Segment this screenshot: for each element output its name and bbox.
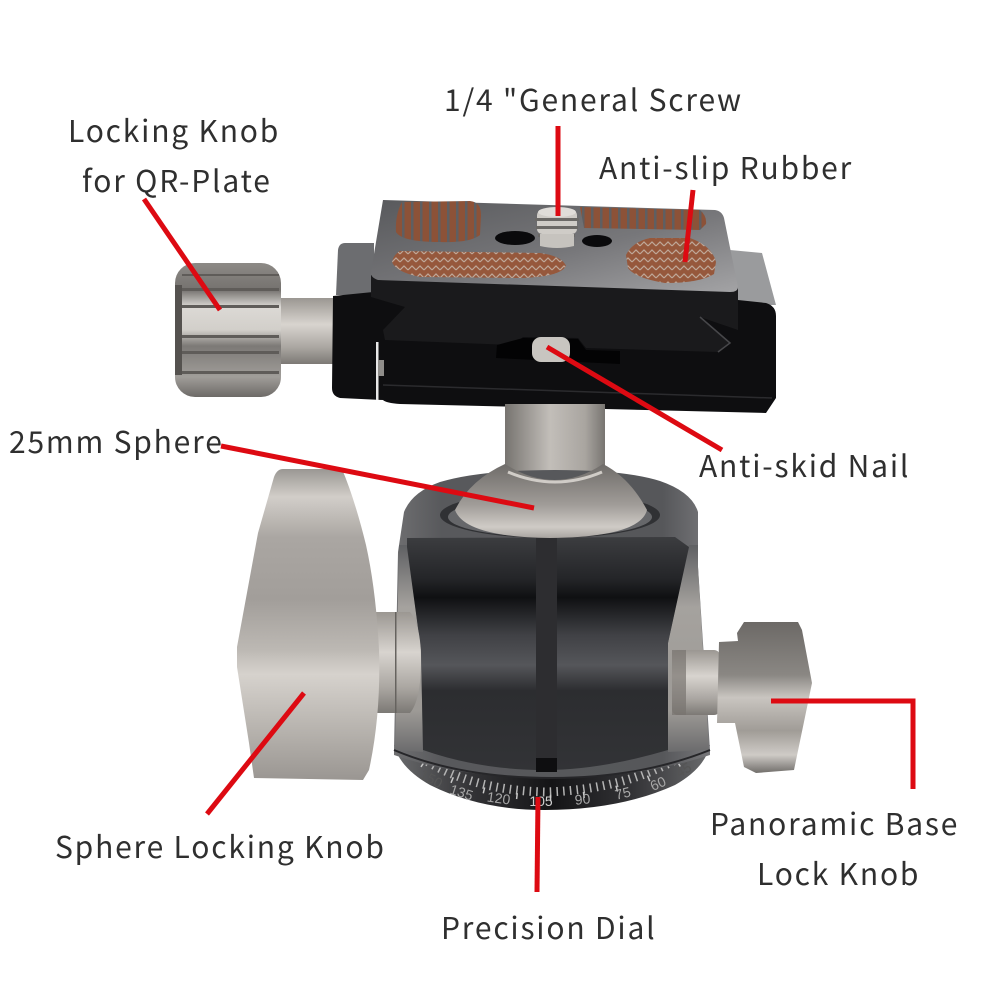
label: Precision Dial: Precision Dial <box>441 904 656 948</box>
dial numbers: 90 <box>574 790 591 808</box>
dial numbers: 150 <box>417 766 446 791</box>
dial numbers: 105 <box>529 793 553 809</box>
icon: 25mm sphere <box>440 464 660 538</box>
icon: panoramic base lock knob <box>672 622 812 773</box>
dial numbers: 135 <box>448 781 475 804</box>
arrow: precision dial <box>537 797 538 892</box>
arrow: sphere <box>221 446 534 508</box>
label: Panoramic Base Lock Knob: Lock Knob <box>757 850 920 894</box>
arrow: locking knob <box>144 199 220 310</box>
pointer lines <box>144 126 913 892</box>
label: Locking Knob for QR-Plate: for QR-Plate <box>82 157 272 201</box>
black face <box>407 537 689 770</box>
label: Anti-skid Nail: Anti-skid Nail <box>699 442 910 486</box>
body side highlights <box>395 545 709 752</box>
label: Locking Knob for QR-Plate <box>68 107 280 201</box>
arrow: panoramic knob <box>771 701 913 789</box>
label: Panoramic Base Lock Knob: Panoramic Base <box>710 800 959 844</box>
icon: clamp body <box>332 243 776 413</box>
dial numbers: 120 <box>486 789 512 808</box>
label: Anti-slip Rubber: Anti-slip Rubber <box>599 144 853 188</box>
arrow: general screw <box>556 126 560 216</box>
icon: general screw <box>535 207 579 248</box>
icon: slot <box>496 338 620 364</box>
dial numbers: 75 <box>613 783 632 803</box>
icon: anti-skid nail <box>532 337 570 362</box>
label: Locking Knob for QR-Plate: Locking Knob <box>68 107 280 151</box>
dial numbers: 45 <box>673 759 694 781</box>
label: General Screw: 1/4 "General Screw <box>444 76 743 120</box>
label: Panoramic Base Lock Knob <box>710 800 959 894</box>
dial numbers <box>417 759 694 809</box>
icon: quick release plate <box>371 200 738 364</box>
arrow: sphere locking knob <box>207 693 304 814</box>
icon: neck post <box>505 404 605 490</box>
icon: base dial <box>394 745 710 810</box>
dial numbers: 60 <box>648 773 669 794</box>
icon: QR locking knob <box>175 263 335 397</box>
arrow: anti-skid nail <box>547 347 722 450</box>
anti-slip rubber pads <box>392 201 716 283</box>
arrow: anti-slip rubber <box>685 190 693 262</box>
icon: sphere locking knob <box>237 469 421 780</box>
illustration: ball head <box>175 200 812 810</box>
icon: ball head body <box>394 470 710 778</box>
neck base highlight <box>508 472 602 482</box>
label: 25mm Sphere: 25mm Sphere <box>9 418 224 462</box>
label: Sphere Locking Knob: Sphere Locking Knob <box>55 823 386 867</box>
